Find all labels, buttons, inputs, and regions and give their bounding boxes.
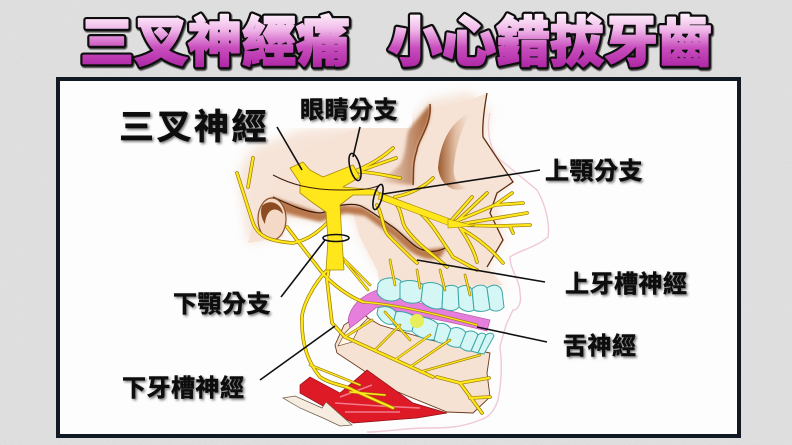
facial profile line <box>483 93 513 267</box>
muscles <box>283 370 447 426</box>
nasal fan <box>448 219 475 228</box>
pointer lines <box>260 127 547 380</box>
upper teeth <box>377 278 504 311</box>
nerve fill <box>237 148 530 413</box>
yellow lingual spot <box>410 314 424 328</box>
title outline: 小心錯拔牙齒 <box>388 13 712 73</box>
eye orbit <box>438 113 470 190</box>
temple shading <box>380 104 430 185</box>
title fill: 小心錯拔牙齒 <box>388 13 712 73</box>
label: 舌神經: 舌神經 <box>563 333 636 360</box>
title outline <box>80 13 712 73</box>
zygomatic band shading <box>268 197 447 259</box>
ear canal <box>258 198 286 240</box>
title outline: 三叉神經痛 <box>80 13 350 73</box>
hyoid bone <box>283 396 352 426</box>
panel: diagram frame <box>58 79 739 436</box>
title fill: 三叉神經痛 <box>80 13 350 73</box>
mandible <box>335 312 490 413</box>
label: 眼睛分支: 眼睛分支 <box>300 97 398 124</box>
gum <box>348 290 490 331</box>
zygomatic arch over nerve <box>273 175 378 190</box>
lower teeth <box>377 307 494 354</box>
skin outline <box>367 113 549 432</box>
nerve outlines <box>237 148 530 413</box>
label: 三叉神經: 三叉神經 <box>119 108 269 147</box>
skull soft back area <box>238 92 513 290</box>
label: 上牙槽神經: 上牙槽神經 <box>565 271 688 298</box>
trigeminal ganglion and trunk <box>290 162 380 270</box>
nerves <box>237 148 530 413</box>
maxillary trunk <box>378 193 450 226</box>
white label patch <box>290 90 412 128</box>
skull bone <box>248 93 513 285</box>
label: 下牙槽神經: 下牙槽神經 <box>122 375 244 402</box>
label: 上顎分支: 上顎分支 <box>545 158 643 185</box>
title fill <box>80 13 712 73</box>
diagram: trigeminal nerve anatomy <box>237 90 549 432</box>
label: 下顎分支: 下顎分支 <box>173 291 271 318</box>
title <box>80 13 712 73</box>
